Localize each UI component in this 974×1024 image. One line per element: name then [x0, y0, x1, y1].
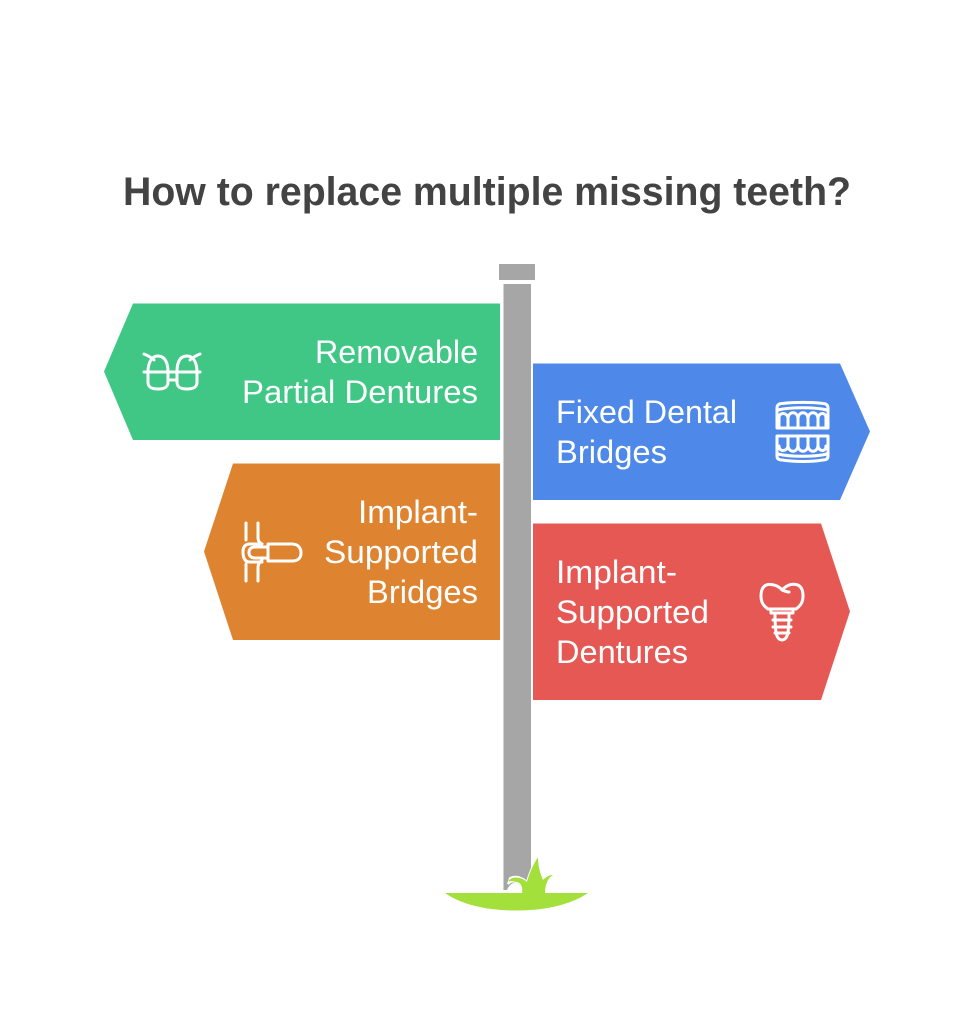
label: implant-supported bridges — [324, 494, 478, 610]
label: implant-supported dentures: Implant- — [556, 554, 677, 590]
label: implant-supported dentures — [556, 554, 709, 670]
title: How to replace multiple missing teeth? — [123, 170, 851, 214]
label: implant-supported bridges: Bridges — [367, 574, 478, 610]
signpost pole — [499, 264, 535, 890]
icon: dental arches — [777, 402, 828, 462]
panel: implant-supported dentures — [533, 524, 850, 700]
label: removable partial dentures: Partial Dentures — [242, 374, 478, 410]
icon: dental implant — [761, 584, 803, 640]
panel: removable partial dentures — [104, 304, 500, 440]
label: removable partial dentures — [242, 334, 478, 410]
label: implant-supported bridges: Supported — [324, 534, 478, 570]
label: implant-supported bridges: Implant- — [358, 494, 478, 530]
label: implant-supported dentures: Dentures — [556, 634, 688, 670]
label: fixed dental bridges: Fixed Dental — [556, 394, 737, 430]
label: implant-supported dentures: Supported — [556, 594, 709, 630]
grass — [445, 857, 588, 910]
panel: implant-supported bridges — [204, 464, 500, 640]
icon: implant tool — [243, 523, 301, 581]
icon: partial denture — [144, 354, 200, 389]
label: fixed dental bridges: Bridges — [556, 434, 667, 470]
label: removable partial dentures: Removable — [315, 334, 478, 370]
panel: fixed dental bridges — [533, 364, 870, 500]
label: fixed dental bridges — [556, 394, 737, 470]
